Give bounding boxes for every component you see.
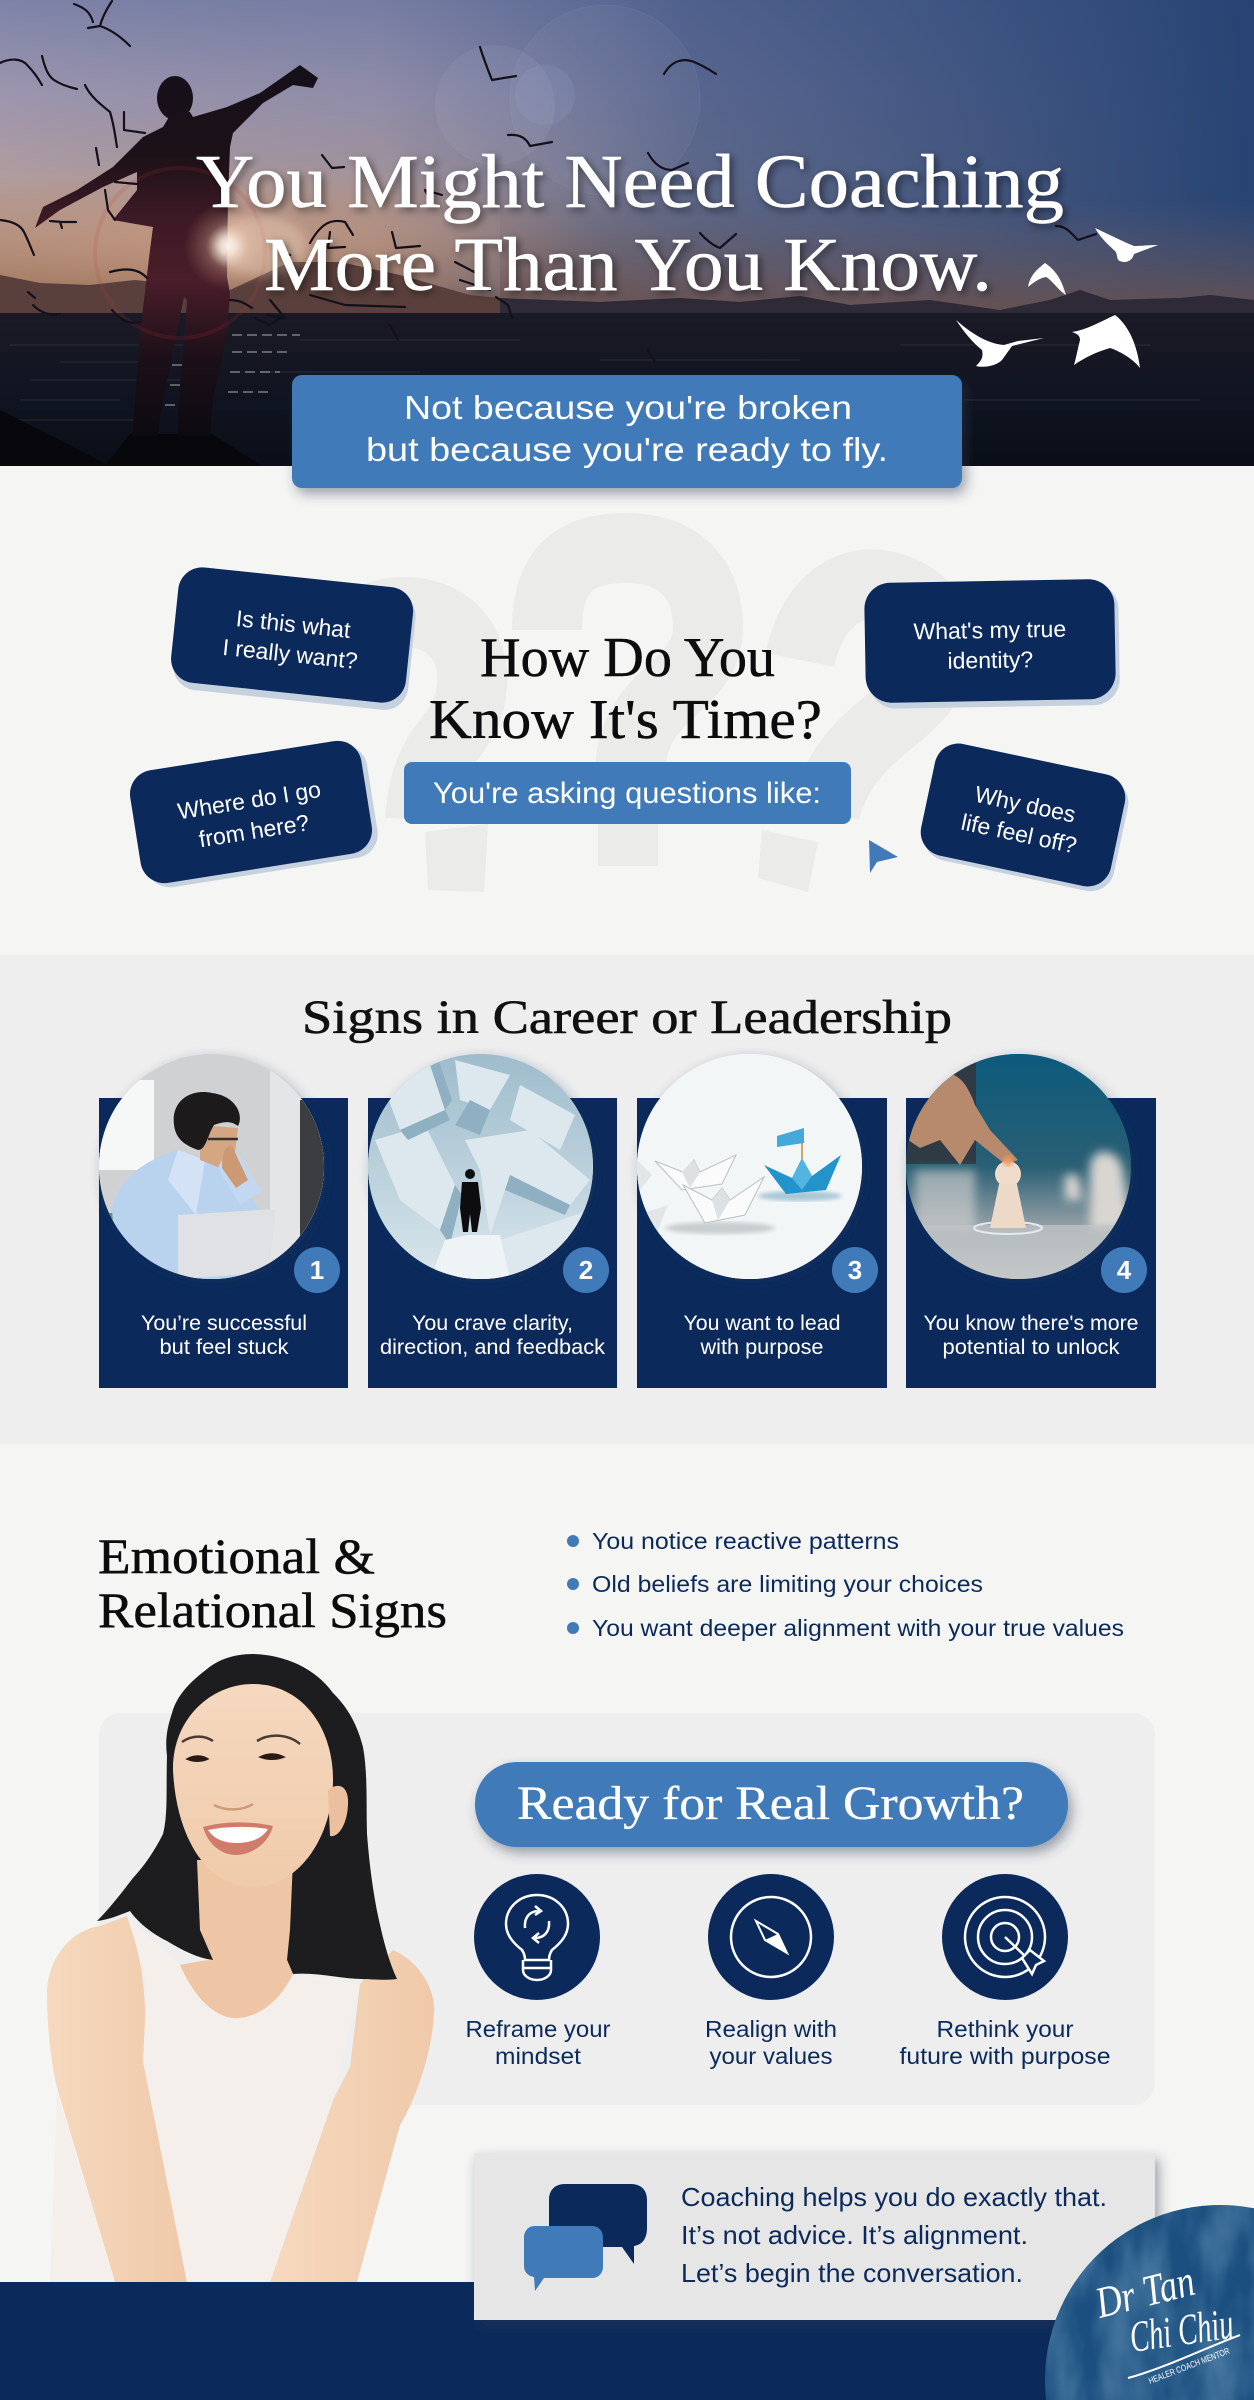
question bubble: What's my true identity: What's my true (913, 616, 1066, 644)
label: realign: Realign with (705, 2016, 837, 2042)
question bubble: Why does life feel off: life feel off? (959, 809, 1079, 858)
number badge (294, 1247, 340, 1293)
pill heading: Ready for Real Growth? (517, 1777, 1024, 1830)
main title: More Than You Know. (264, 223, 992, 307)
card 1: successful but stuck (99, 1054, 348, 1388)
label: reframe: mindset (495, 2043, 581, 2069)
number badge: 3 (848, 1255, 862, 1285)
footer band (0, 2282, 1254, 2400)
heading: signs: Signs in Career or Leadership (302, 991, 952, 1044)
panel: signs in career or leadership (90, 1000, 1156, 1388)
bullet list: Old beliefs are limiting your choices (592, 1571, 983, 1597)
pill heading (475, 1762, 1068, 1847)
card 1: successful but stuck: but feel stuck (160, 1336, 289, 1359)
question bubble: What's my true identity: identity? (947, 646, 1033, 674)
number badge (832, 1247, 878, 1293)
logo badge: Dr Tan (1090, 2256, 1199, 2328)
card 2: clarity (368, 1054, 617, 1388)
card 3: lead with purpose (637, 1054, 887, 1388)
woman portrait (47, 1654, 434, 2282)
question bubble: Is this what I really want: Is this what (235, 605, 352, 643)
label: rethink: future with purpose (900, 2043, 1110, 2069)
number badge: 4 (1117, 1255, 1132, 1285)
question bubble: Why does life feel off (915, 739, 1134, 896)
number badge (563, 1247, 609, 1293)
man silhouette (35, 65, 318, 436)
label: rethink (900, 2016, 1110, 2069)
label: rethink: Rethink your (936, 2016, 1074, 2042)
card 2: clarity: direction, and feedback (380, 1336, 606, 1359)
icon: compass (708, 1874, 834, 2000)
face details (182, 1736, 300, 1855)
panel: ready for real growth (99, 1713, 1155, 2105)
card 4: potential to unlock (906, 1054, 1156, 1388)
background question marks (313, 548, 938, 892)
card 4: potential to unlock: You know there's more (924, 1312, 1138, 1335)
question bubble: Why does life feel off: Why does (973, 781, 1078, 828)
heading: emotional and relational signs: Emotional & (98, 1528, 375, 1584)
section heading: how do you know: How Do You (480, 627, 775, 689)
question bubble: Is this what I really want (168, 565, 419, 712)
card 1: successful but stuck: You’re successful (141, 1312, 307, 1335)
question bubble: What's my true identity (864, 579, 1120, 709)
number badge: 2 (579, 1255, 593, 1285)
icon: target (942, 1874, 1068, 2000)
question bubble: Where do I go from here: from here? (197, 809, 311, 852)
section heading: how do you know (429, 627, 822, 751)
label: realign (705, 2016, 837, 2069)
hero banner photo (0, 0, 1254, 466)
section heading: how do you know: Know It's Time? (429, 689, 822, 751)
logo badge (1040, 2200, 1254, 2400)
face (173, 1684, 333, 1887)
label: reframe: Reframe your (466, 2016, 611, 2042)
icon: lightbulb (474, 1874, 600, 2000)
right arm and shoulder (270, 1950, 434, 2282)
number badge: 1 (310, 1255, 324, 1285)
callout: coaching helps: Let’s begin the conversation. (681, 2258, 1023, 2288)
callout: coaching helps: Coaching helps you do exactly that. (681, 2182, 1107, 2212)
question bubble: Is this what I really want: I really want? (221, 634, 359, 674)
tagline box (292, 375, 962, 488)
flock of dark birds (0, 1, 1096, 362)
button: asking questions: You're asking questions like: (433, 777, 821, 810)
label: realign: your values (710, 2043, 832, 2069)
sleeveless top (50, 1916, 360, 2282)
main title: You Might Need Coaching (196, 140, 1064, 224)
card 2: clarity: You crave clarity, (412, 1312, 573, 1335)
logo badge: HEALER COACH MENTOR (1147, 2346, 1231, 2386)
hair (97, 1654, 397, 1980)
heading: emotional and relational signs (98, 1528, 447, 1638)
question bubble: Where do I go from here: Where do I go (176, 776, 323, 824)
card 3: lead with purpose: with purpose (699, 1336, 824, 1359)
bullet list: You notice reactive patterns (592, 1528, 899, 1554)
card 3: lead with purpose: You want to lead (684, 1312, 840, 1335)
number badge (1101, 1247, 1147, 1293)
left arm and shoulder (47, 1916, 187, 2282)
card 4: potential to unlock: potential to unlock (942, 1336, 1120, 1359)
bullet list (567, 1528, 1124, 1641)
bullet list: You want deeper alignment with your true values (592, 1615, 1124, 1641)
button: asking questions (404, 762, 851, 824)
heading: emotional and relational signs: Relational Signs (98, 1582, 447, 1638)
icon: chat bubbles (524, 2184, 647, 2291)
question bubble: Where do I go from here (127, 737, 381, 892)
callout: coaching helps: It’s not advice. It’s alignment. (681, 2220, 1028, 2250)
white birds (956, 228, 1158, 368)
icon: pointer arrow (869, 840, 898, 873)
main title (196, 140, 1064, 307)
tagline box: but because you're ready to fly. (366, 431, 888, 468)
tagline box: Not because you're broken (404, 389, 852, 426)
neck and chest (180, 1860, 293, 2018)
paper boats (637, 1154, 766, 1230)
callout: coaching helps (474, 2153, 1155, 2320)
label: reframe (466, 2016, 611, 2069)
